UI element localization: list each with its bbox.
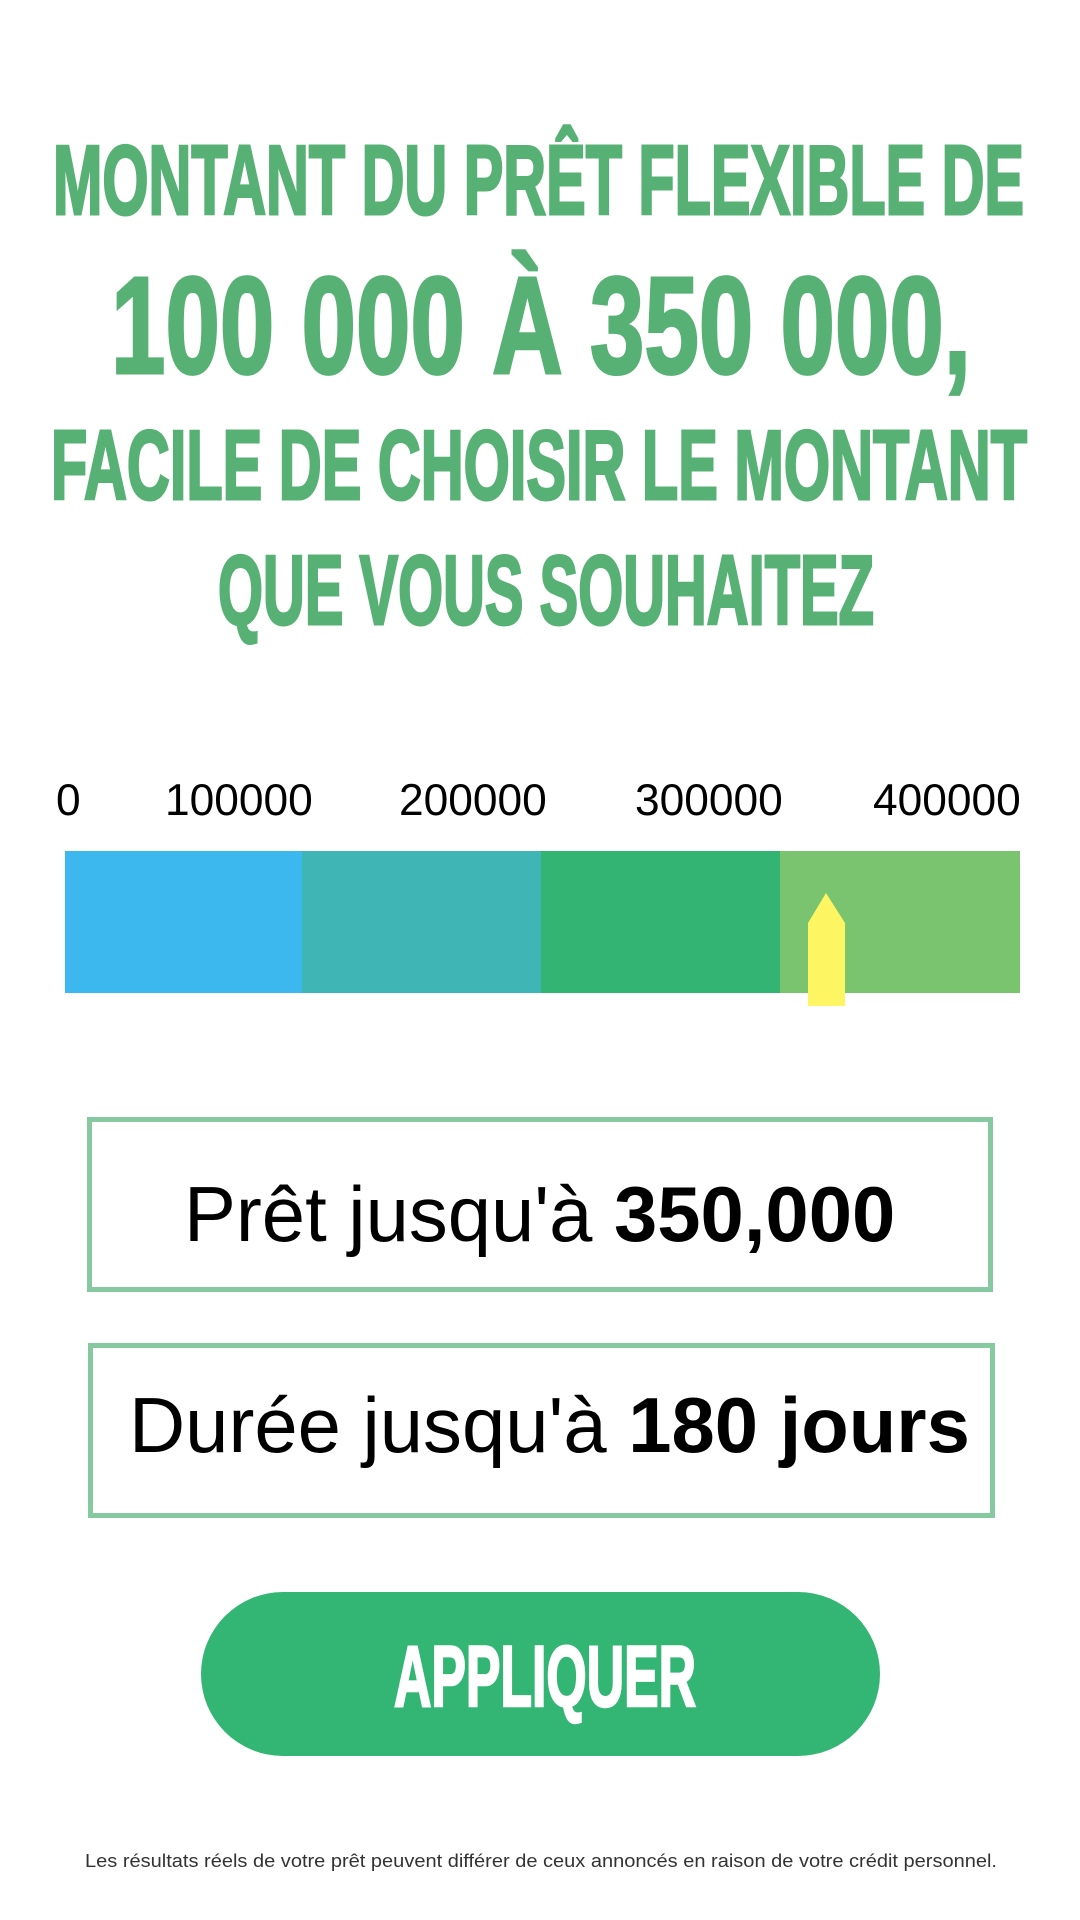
scale labels: 300000 — [635, 776, 783, 825]
apply button: APPLIQUER — [394, 1629, 696, 1725]
scale labels — [56, 776, 1021, 825]
apply button — [201, 1592, 880, 1756]
footnote: Les résultats réels de votre prêt peuvent différer de ceux annoncés en raison de votre crédit personnel. — [85, 1850, 997, 1871]
scale labels: 400000 — [873, 776, 1021, 825]
title — [51, 125, 1027, 645]
panel: loan amount — [90, 1120, 990, 1290]
icon: yellow marker arrow — [808, 893, 845, 1006]
scale labels: 100000 — [165, 776, 313, 825]
amount scale bar — [65, 851, 1020, 993]
panel: loan duration — [90, 1346, 992, 1516]
scale labels: 0 — [56, 776, 81, 825]
panel: loan amount: Prêt jusqu'à 350,000 — [184, 1172, 895, 1258]
panel: loan duration: Durée jusqu'à 180 jours — [129, 1383, 970, 1469]
scale labels: 200000 — [399, 776, 547, 825]
